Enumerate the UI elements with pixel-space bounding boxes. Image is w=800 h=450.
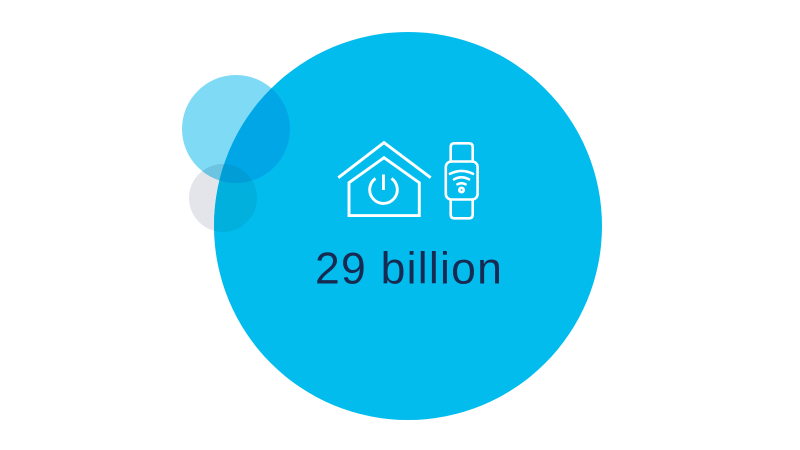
icon: smart home with power symbol	[338, 143, 431, 216]
icon: smart watch with wifi symbol	[446, 143, 478, 218]
small light blue circle	[182, 75, 290, 183]
infographic: 29 billion connected devices	[182, 32, 602, 420]
overlap: all three circles	[220, 164, 252, 183]
small grey circle	[189, 164, 257, 232]
overlap: grey and light blue	[202, 164, 224, 180]
overlap: grey and large circle	[214, 165, 257, 232]
headline number: 29 billion	[315, 244, 503, 294]
overlap: light blue and large circle	[220, 88, 290, 180]
large blue circle	[214, 32, 602, 420]
